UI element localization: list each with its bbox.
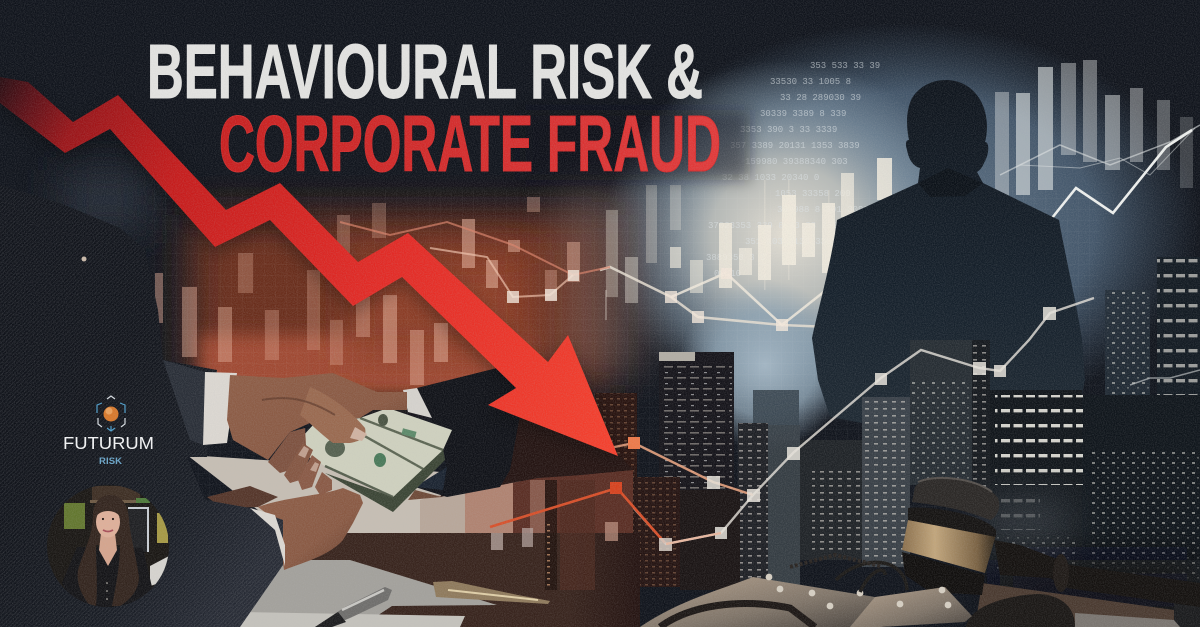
data number readout: 3353 390 3 33 3339 — [740, 125, 837, 135]
presenter portrait — [47, 485, 169, 607]
tower A — [659, 352, 734, 580]
lower hand — [207, 486, 363, 570]
portrait neck — [99, 533, 117, 566]
candlestick chart: right blue — [995, 60, 1193, 200]
handcuffs — [640, 555, 972, 627]
title line one: BEHAVIOURAL RISK & — [147, 29, 703, 115]
red falling arrow — [0, 77, 622, 462]
right suit sleeve — [408, 368, 520, 500]
far right towers — [1082, 257, 1200, 595]
candlestick chart: centre bright — [605, 158, 892, 320]
data number readout: 159980 39388340 303 — [745, 157, 848, 167]
portrait blouse — [134, 548, 152, 586]
judge's gavel — [902, 477, 1200, 607]
red left blocks — [595, 393, 740, 590]
data number readout — [706, 61, 880, 279]
tower with lit windows — [990, 370, 1200, 590]
title — [147, 29, 750, 188]
grid overlay — [150, 190, 1100, 540]
stack of dollar bills — [292, 408, 452, 512]
city skyline — [595, 257, 1200, 595]
left suit sleeve — [0, 185, 283, 627]
data number readout: 30339 3389 8 339 — [760, 109, 846, 119]
Futurum Risk logo — [63, 396, 154, 467]
data number readout: 33530 33 1005 8 — [770, 77, 851, 87]
trend lines upper — [340, 125, 1200, 331]
silhouette of businessman — [812, 80, 1085, 430]
candlestick chart: red zone — [155, 197, 580, 385]
data number readout: 351 10339133 3353 33 33 — [745, 237, 869, 247]
tower D — [800, 440, 866, 560]
tower E — [862, 340, 990, 567]
lower centre: pale backdrop, dark shadow and desk — [187, 370, 640, 627]
left shirt cuffs — [203, 372, 285, 566]
rising trend line — [600, 298, 1094, 544]
data number readout: 360988 8 301 309328 — [777, 205, 880, 215]
data number readout: 08 10 — [714, 269, 741, 279]
portrait face — [96, 506, 120, 538]
logo subtitle: RISK — [99, 456, 122, 467]
data number readout: 33 28 289030 39 — [780, 93, 861, 103]
silver pen — [315, 587, 392, 627]
tower B — [738, 390, 800, 595]
right shirt cuff — [403, 388, 432, 418]
portrait hair — [78, 495, 139, 606]
gold pen — [433, 581, 550, 604]
upper hand — [227, 373, 407, 495]
data number readout: 37023353 339 8 33 33 282 — [708, 221, 838, 231]
data number readout: 357 3389 20131 1353 3839 — [730, 141, 860, 151]
data number readout: 32 38 1033 20340 0 — [722, 173, 819, 183]
data number readout: 3889350 3 3 — [706, 253, 765, 263]
data number readout: 1053 33358 200 — [775, 189, 851, 199]
data number readout: 353 533 33 39 — [810, 61, 880, 71]
title line two: CORPORATE FRAUD — [219, 99, 721, 188]
logo wordmark: FUTURUM — [63, 433, 154, 453]
logo icon: orange orb — [97, 396, 125, 431]
red chart overlay on desk — [490, 482, 721, 551]
ground smoke — [980, 495, 1200, 620]
wooden surface and block — [966, 583, 1200, 627]
